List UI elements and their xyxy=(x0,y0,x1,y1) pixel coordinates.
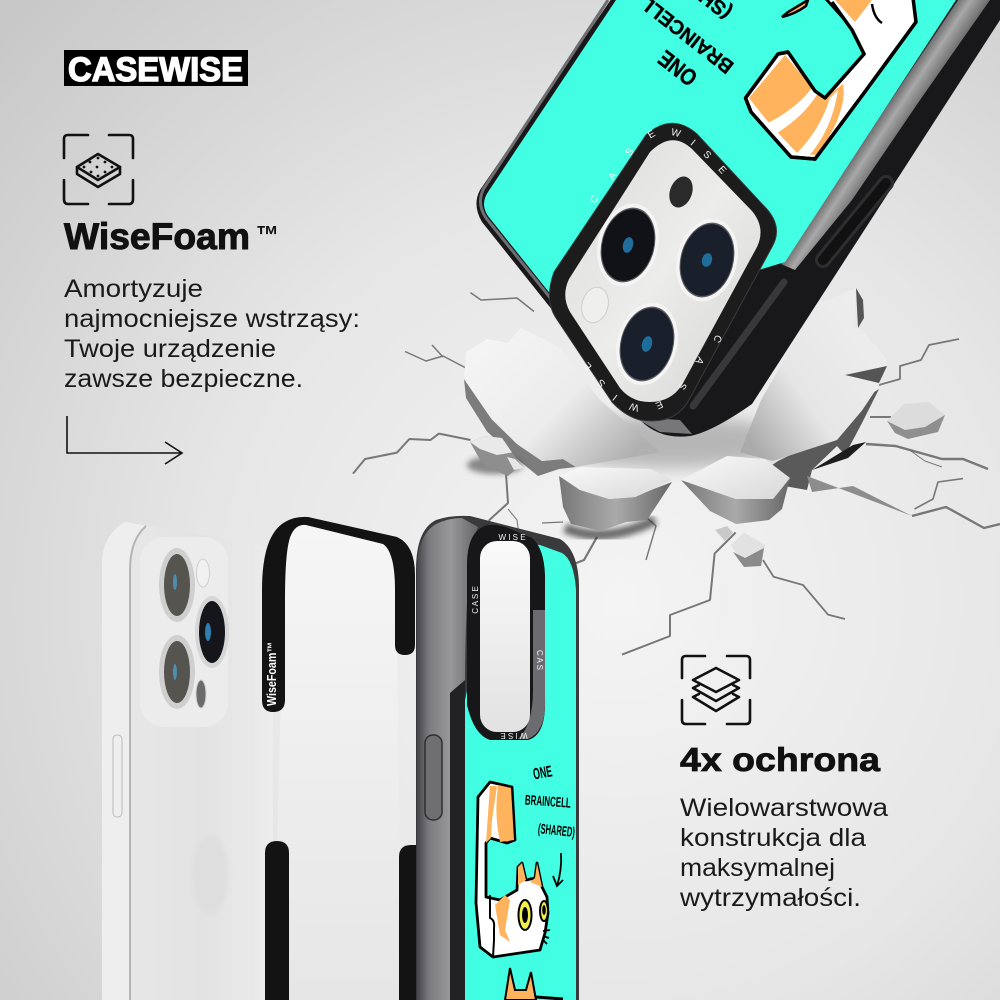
lens bottom xyxy=(159,635,195,709)
phone body xyxy=(102,522,273,1000)
ring lettering: W xyxy=(628,400,640,413)
illustration: orange-white cat xyxy=(476,782,550,957)
ring lettering: E xyxy=(716,164,728,177)
case dark shell xyxy=(476,0,1000,437)
ring lettering: S xyxy=(595,376,608,389)
illustration: handwritten caption: BRAINCELL xyxy=(524,791,572,811)
text: protection description: Wielowarstwowa xyxy=(680,794,888,822)
logo: CASEWISE: CASEWISE xyxy=(68,51,243,89)
ring lettering: E xyxy=(582,359,594,372)
ring lettering: A xyxy=(607,170,620,182)
side button xyxy=(823,183,886,260)
band label: WiseFoam™ xyxy=(265,642,279,706)
side wall xyxy=(417,518,478,1000)
Apple logo shadow xyxy=(192,835,228,915)
crack lines xyxy=(353,293,1000,655)
volume button outline xyxy=(113,735,122,817)
ring lettering: C xyxy=(711,332,724,344)
teal panel xyxy=(465,540,576,1000)
cracked wall: rear slabs xyxy=(464,288,945,516)
shadow under phone xyxy=(550,416,790,468)
heading: WiseFoam: ™ xyxy=(256,220,279,250)
illustration: handwritten caption xyxy=(524,763,576,840)
illustration: handwritten caption: ONE xyxy=(653,45,702,92)
arrow xyxy=(67,416,182,464)
frame edge xyxy=(102,522,146,1000)
ring lettering: W I S E xyxy=(498,533,526,542)
phone: bare iPhone back view xyxy=(102,522,402,1000)
camera ring xyxy=(549,123,776,421)
ring lettering: S xyxy=(675,380,688,392)
lens middle xyxy=(195,596,229,668)
camera plateau xyxy=(140,537,228,727)
illustration: handwritten caption: (SHARED) xyxy=(537,820,576,840)
illustration: cat (upside-down) xyxy=(746,0,916,159)
ring lettering: I xyxy=(611,392,620,402)
translucent base of case xyxy=(625,412,692,434)
case shell xyxy=(416,516,579,1000)
camera ring and window xyxy=(467,525,545,740)
cracked wall: front chips xyxy=(559,456,790,567)
center-left chip xyxy=(559,467,672,535)
right wedge xyxy=(807,476,912,516)
icon: layers xyxy=(682,656,750,724)
lens 3 xyxy=(607,296,687,392)
lens 2 xyxy=(667,212,747,308)
small right rock xyxy=(887,402,945,439)
ring lettering: C xyxy=(588,193,602,206)
ring lettering: S xyxy=(701,149,713,162)
small left rock xyxy=(467,436,524,476)
text: protection description: wytrzymałości. xyxy=(679,884,861,912)
cat whiskers xyxy=(543,930,550,944)
side button xyxy=(425,735,442,820)
teal back panel xyxy=(484,0,956,306)
WiseFoam black inner band xyxy=(262,517,418,1000)
camera plate xyxy=(565,140,761,402)
ring lettering: I xyxy=(688,138,697,148)
text: protection description xyxy=(679,794,888,912)
ring lettering: S xyxy=(624,146,637,158)
ring lettering xyxy=(471,533,544,740)
text: WiseFoam description: zawsze bezpieczne. xyxy=(64,365,303,393)
ring lettering: C A S E xyxy=(471,586,480,614)
ring lettering: A xyxy=(693,355,706,366)
heading: WiseFoam: WiseFoam xyxy=(64,216,250,257)
ring lettering: C A S xyxy=(535,650,544,670)
ring lettering: W xyxy=(670,127,682,140)
lens top xyxy=(159,548,195,622)
text: protection description: konstrukcja dla xyxy=(680,824,866,852)
lens 1 xyxy=(588,197,668,293)
phone: side-on case with illustration xyxy=(416,516,579,1000)
phone: tilted case with camera xyxy=(476,0,1000,437)
microphone xyxy=(196,680,206,708)
clear back panel xyxy=(273,524,402,1000)
lower strips xyxy=(265,841,289,1000)
text: WiseFoam description xyxy=(64,275,360,393)
side wall: grey glossy strip xyxy=(781,0,990,270)
ring lettering: E xyxy=(653,398,664,411)
ring lettering xyxy=(582,127,728,413)
left slab xyxy=(464,328,660,476)
right slab xyxy=(740,288,887,490)
text: WiseFoam description: Twoje urządzenie xyxy=(64,335,276,363)
left rim highlight xyxy=(480,0,608,300)
text: protection description: maksymalnej xyxy=(680,854,835,882)
center-right chip xyxy=(681,456,790,524)
ring lettering: E xyxy=(646,128,658,141)
cat eyes xyxy=(518,900,532,930)
ring lettering: W I S E xyxy=(500,731,528,740)
illustration: second cat head xyxy=(505,968,536,1000)
text: WiseFoam description: najmocniejsze wstrząsy: xyxy=(64,305,360,333)
microphone xyxy=(665,173,697,211)
small bottom chips xyxy=(715,526,765,567)
flash xyxy=(196,559,210,587)
illustration: handwritten caption: ONE xyxy=(532,763,554,783)
lower gloss on black wall xyxy=(693,282,784,406)
text: WiseFoam description: Amortyzuje xyxy=(64,275,203,303)
heading: 4x ochrona: 4x ochrona xyxy=(680,741,881,778)
illustration: caption arrow xyxy=(553,853,563,886)
flash xyxy=(578,284,612,326)
icon: foam pad xyxy=(64,135,133,204)
